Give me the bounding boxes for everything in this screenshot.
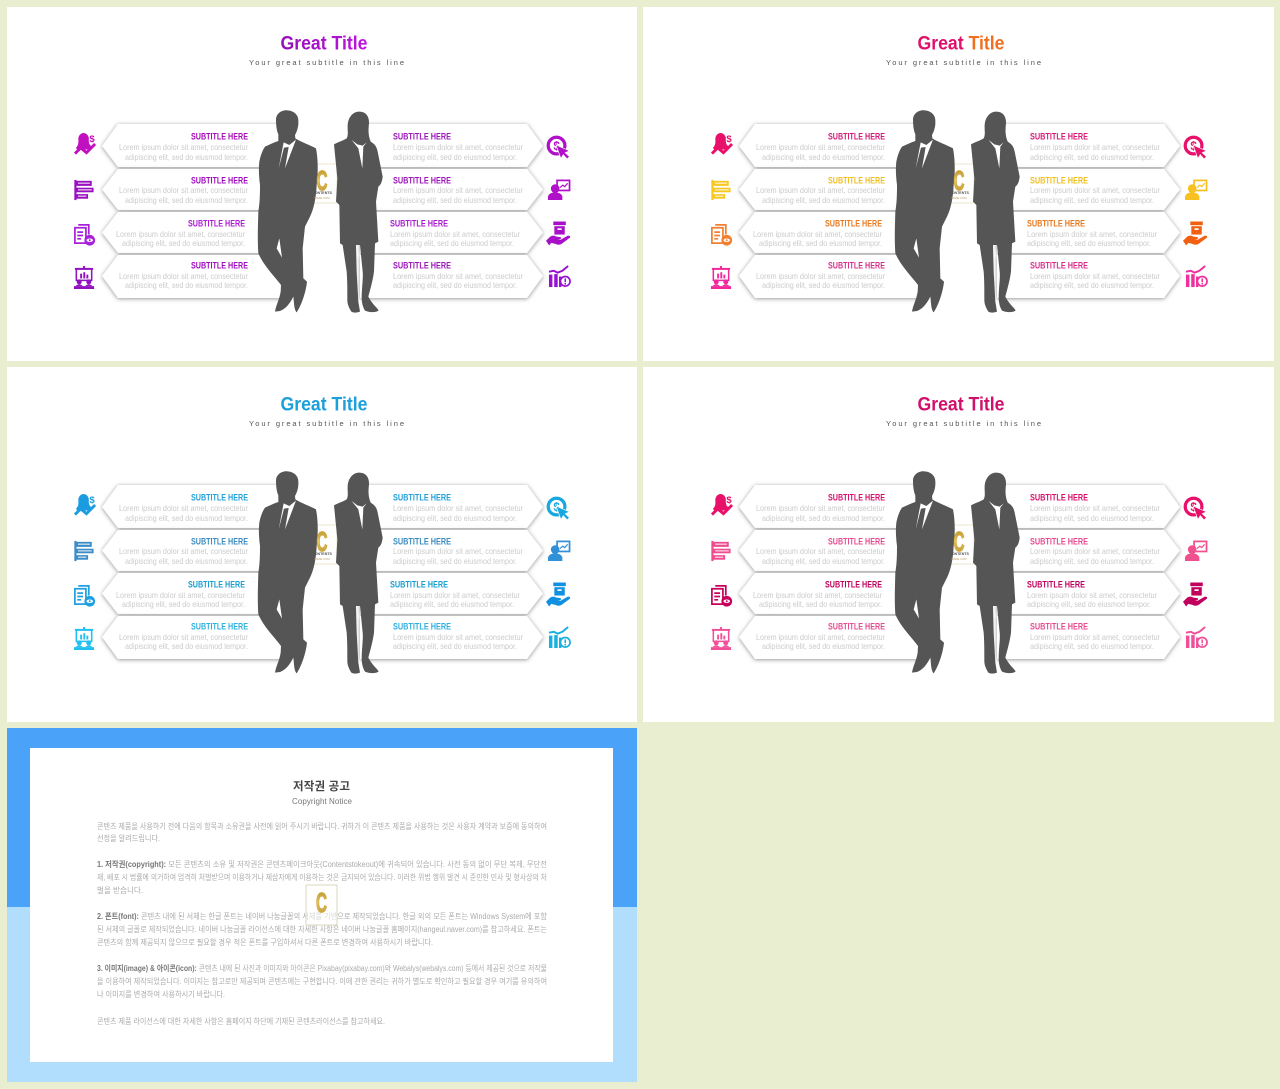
logo watermark: C bbox=[316, 887, 327, 918]
text block: font clause: 된 서체의 글꼴로 제작되었습니다. 네이버 나눔글꼴 라이선스에 대한 자세한 사항은 네이버 나눔글꼴 홈페이지(hangeul.naver.com)를 참고하세요. 폰트는 bbox=[97, 924, 547, 934]
arrow row: left 3 bbox=[102, 573, 285, 614]
arrow row: right 2: adipiscing elit, sed do eiusmod tempor. bbox=[1030, 196, 1154, 205]
arrow row: right 4: adipiscing elit, sed do eiusmod tempor. bbox=[1030, 642, 1154, 651]
arrow row: right 3: adipiscing elit, sed do eiusmod tempor. bbox=[1027, 600, 1151, 609]
arrow row: right 3 bbox=[997, 212, 1180, 253]
heading: copyright notice: 저작권 공고 bbox=[293, 779, 350, 793]
arrow row: left 1: Lorem ipsum dolor sit amet, consectetur bbox=[756, 143, 885, 152]
arrow row: left 3: SUBTITLE HERE bbox=[188, 218, 245, 228]
arrow row: right 2 bbox=[360, 169, 543, 210]
arrow row: right 2: Lorem ipsum dolor sit amet, consectetur bbox=[1030, 547, 1160, 556]
icon: list bbox=[711, 180, 731, 200]
arrow row: left 4: adipiscing elit, sed do eiusmod tempor. bbox=[125, 281, 248, 290]
arrow row: left 2 bbox=[739, 169, 922, 210]
arrow row: left 3: adipiscing elit, sed do eiusmod tempor. bbox=[122, 600, 245, 609]
arrow row: right 4: adipiscing elit, sed do eiusmod tempor. bbox=[393, 642, 517, 651]
arrow row: right 4: Lorem ipsum dolor sit amet, consectetur bbox=[1030, 633, 1160, 642]
icon: list bbox=[74, 180, 94, 200]
arrow row: right 4 bbox=[997, 255, 1180, 298]
arrow row: right 1: adipiscing elit, sed do eiusmod tempor. bbox=[393, 153, 517, 162]
arrow row: left 2: adipiscing elit, sed do eiusmod tempor. bbox=[125, 196, 248, 205]
arrow row: right 3 bbox=[997, 573, 1180, 614]
arrow row: right 2: SUBTITLE HERE bbox=[393, 176, 451, 186]
arrow row: left 1: Lorem ipsum dolor sit amet, consectetur bbox=[119, 504, 248, 513]
arrow row: right 3: Lorem ipsum dolor sit amet, consectetur bbox=[390, 591, 520, 600]
arrow row: left 3: Lorem ipsum dolor sit amet, consectetur bbox=[116, 230, 245, 239]
icon: bell person bbox=[75, 133, 95, 154]
panel: slide 4 crimson bbox=[643, 367, 1274, 722]
arrow row: right 4: Lorem ipsum dolor sit amet, consectetur bbox=[1030, 272, 1160, 281]
icon: chart info bbox=[1186, 627, 1207, 648]
icon: box on hand bbox=[546, 583, 570, 606]
icon: document eye bbox=[712, 586, 732, 607]
icon: document eye bbox=[75, 586, 95, 607]
arrow row: left 4: adipiscing elit, sed do eiusmod tempor. bbox=[762, 642, 885, 651]
arrow row: left 4: Lorem ipsum dolor sit amet, consectetur bbox=[756, 633, 885, 642]
arrow row: left 4: SUBTITLE HERE bbox=[828, 260, 885, 270]
icon: presenter bbox=[1185, 541, 1207, 561]
icon: presenter bbox=[548, 180, 570, 200]
text block: image and icon clause: 3. 이미지(image) & 아이콘(icon): 콘텐츠 내에 된 사진과 이미지와 아이콘은 Pixabay(pixabay.com)와 Webalys(webalys.com) 등에서 제공된 것으로 저작물 bbox=[97, 963, 547, 973]
icon: document eye bbox=[75, 225, 95, 246]
icon: presenter bbox=[548, 541, 570, 561]
arrow row: left 4: adipiscing elit, sed do eiusmod tempor. bbox=[125, 642, 248, 651]
icon: dollar target bbox=[548, 137, 570, 159]
text block: copyright clause: 재, 배포 시 법률에 의거하여 엄격히 처벌받으며 이용하거나 제삼자에게 이용하는 것은 금지되어 있습니다. 이러한 위법 행위 발견 시 준민한 민사 및 형사상의 처 bbox=[97, 872, 547, 882]
icon: presentation board bbox=[711, 627, 731, 650]
title: Great Title bbox=[280, 32, 368, 54]
arrow row: right 2: Lorem ipsum dolor sit amet, consectetur bbox=[393, 547, 523, 556]
arrow row: left 2: SUBTITLE HERE bbox=[191, 536, 248, 546]
text block: font clause bbox=[97, 911, 547, 947]
arrow row: left 2 bbox=[102, 169, 285, 210]
text block: copyright clause bbox=[97, 859, 547, 895]
logo watermark bbox=[306, 885, 337, 925]
arrow row: right 1: adipiscing elit, sed do eiusmod tempor. bbox=[1030, 514, 1154, 523]
arrow row: right 4: SUBTITLE HERE bbox=[393, 260, 451, 270]
arrow row: right 3: Lorem ipsum dolor sit amet, consectetur bbox=[390, 230, 520, 239]
icon: list bbox=[711, 541, 731, 561]
icon: bell person bbox=[712, 494, 732, 515]
text block: image and icon clause: 을 이용하여 제작되었습니다. 이미지는 참고로만 제공되며 콘텐츠에는 구현합니다. 이에 관한 권리는 귀하가 별도로 확인하고 필요할 경우 여기를 유의하여 bbox=[97, 976, 547, 986]
arrow row: left 1 bbox=[102, 485, 285, 528]
icon: document eye bbox=[712, 225, 732, 246]
arrow row: left 1: adipiscing elit, sed do eiusmod tempor. bbox=[762, 153, 885, 162]
arrow row: left 3: Lorem ipsum dolor sit amet, consectetur bbox=[753, 230, 882, 239]
subtitle: Your great subtitle in this line bbox=[886, 419, 1041, 428]
arrow row: right 2: SUBTITLE HERE bbox=[1030, 176, 1088, 186]
arrow row: left 2: Lorem ipsum dolor sit amet, consectetur bbox=[119, 547, 248, 556]
arrow row: left 1: SUBTITLE HERE bbox=[828, 492, 885, 502]
arrow row: right 2 bbox=[997, 530, 1180, 571]
arrow row: left 3 bbox=[739, 573, 922, 614]
panel: slide 2 multicolor bbox=[643, 7, 1274, 361]
icon: dollar target bbox=[1185, 137, 1206, 159]
arrow row: right 4: Lorem ipsum dolor sit amet, consectetur bbox=[393, 272, 523, 281]
arrow row: right 2: adipiscing elit, sed do eiusmod tempor. bbox=[393, 557, 517, 566]
icon: dollar target bbox=[1185, 498, 1206, 520]
arrow row: left 2: Lorem ipsum dolor sit amet, consectetur bbox=[756, 547, 885, 556]
text block: introduction: 콘텐츠 제품을 사용하기 전에 다음의 항목과 소유권을 사전에 읽어 주시기 바랍니다. 귀하가 이 콘텐츠 제품을 사용하는 것은 사용자 계약과 보증에 동의하여 bbox=[97, 821, 547, 831]
arrow row: right 1: SUBTITLE HERE bbox=[393, 492, 451, 502]
arrow row: left 3: SUBTITLE HERE bbox=[188, 580, 245, 590]
arrow row: right 1: adipiscing elit, sed do eiusmod tempor. bbox=[393, 514, 517, 523]
arrow row: right 1 bbox=[997, 124, 1180, 167]
arrow row: left 1: SUBTITLE HERE bbox=[191, 132, 248, 142]
arrow row: right 3: Lorem ipsum dolor sit amet, consectetur bbox=[1027, 230, 1157, 239]
arrow row: left 3 bbox=[739, 212, 922, 253]
icon: box on hand bbox=[1183, 222, 1207, 245]
text block: introduction: 선정을 알려드립니다. bbox=[97, 833, 160, 843]
arrow row: left 4 bbox=[739, 255, 922, 298]
arrow row: right 1: SUBTITLE HERE bbox=[1030, 132, 1088, 142]
arrow row: right 1: SUBTITLE HERE bbox=[1030, 492, 1088, 502]
icon: presenter bbox=[1185, 180, 1207, 200]
arrow row: right 1 bbox=[360, 124, 543, 167]
icon: presentation board bbox=[74, 627, 94, 650]
subtitle: Your great subtitle in this line bbox=[249, 419, 404, 428]
icon: dollar target bbox=[548, 498, 570, 520]
title: Great Title bbox=[918, 32, 1005, 54]
panel: copyright notice slide bbox=[7, 728, 637, 1082]
arrow row: right 3: SUBTITLE HERE bbox=[1027, 218, 1085, 228]
arrow row: left 2: adipiscing elit, sed do eiusmod tempor. bbox=[125, 557, 248, 566]
text block: image and icon clause: 나 이미지를 변경하여 사용하시기 바랍니다. bbox=[97, 989, 225, 999]
subtitle: Your great subtitle in this line bbox=[886, 58, 1041, 67]
arrow row: left 3: SUBTITLE HERE bbox=[825, 218, 882, 228]
arrow row: left 3: Lorem ipsum dolor sit amet, consectetur bbox=[753, 591, 882, 600]
arrow row: left 4 bbox=[102, 255, 285, 298]
arrow row: right 4 bbox=[360, 616, 543, 659]
arrow row: left 1 bbox=[739, 124, 922, 167]
icon: bell person bbox=[712, 133, 732, 154]
arrow row: right 2 bbox=[997, 169, 1180, 210]
arrow row: right 1: SUBTITLE HERE bbox=[393, 132, 451, 142]
sub-heading: English title: Copyright Notice bbox=[292, 797, 353, 806]
arrow row: left 4: Lorem ipsum dolor sit amet, consectetur bbox=[756, 272, 885, 281]
arrow row: left 2: SUBTITLE HERE bbox=[191, 176, 248, 186]
icon: chart info bbox=[1186, 266, 1207, 287]
arrow row: right 1: Lorem ipsum dolor sit amet, consectetur bbox=[393, 143, 523, 152]
arrow row: right 2: Lorem ipsum dolor sit amet, consectetur bbox=[393, 186, 523, 195]
silhouettes: businessman and businesswoman with logo bbox=[895, 110, 1020, 313]
arrow row: right 2: adipiscing elit, sed do eiusmod tempor. bbox=[1030, 557, 1154, 566]
text block: introduction bbox=[97, 821, 547, 843]
arrow row: right 4 bbox=[360, 255, 543, 298]
arrow row: left 1: adipiscing elit, sed do eiusmod tempor. bbox=[762, 514, 885, 523]
arrow row: left 1: Lorem ipsum dolor sit amet, consectetur bbox=[119, 143, 248, 152]
arrow row: left 2 bbox=[102, 530, 285, 571]
arrow row: left 4: Lorem ipsum dolor sit amet, consectetur bbox=[119, 272, 248, 281]
icon: bell person bbox=[75, 494, 95, 515]
icon: list bbox=[74, 541, 94, 561]
text block: image and icon clause bbox=[97, 963, 547, 999]
arrow row: right 3 bbox=[360, 212, 543, 253]
title: Great Title bbox=[918, 394, 1005, 416]
arrow row: right 3: Lorem ipsum dolor sit amet, consectetur bbox=[1027, 591, 1157, 600]
arrow row: right 4 bbox=[997, 616, 1180, 659]
arrow row: left 1: SUBTITLE HERE bbox=[828, 132, 885, 142]
arrow row: left 2: SUBTITLE HERE bbox=[828, 176, 885, 186]
silhouettes: businessman and businesswoman with logo bbox=[895, 471, 1020, 674]
panel: slide 3 blue bbox=[7, 367, 637, 722]
arrow row: right 1 bbox=[997, 485, 1180, 528]
text block: license note: 콘텐츠 제품 라이선스에 대한 자세한 사항은 홈페이지 하단에 기재된 콘텐츠라이선스를 참고하세요. bbox=[97, 1016, 385, 1026]
arrow row: left 3: SUBTITLE HERE bbox=[825, 580, 882, 590]
arrow row: left 3: Lorem ipsum dolor sit amet, consectetur bbox=[116, 591, 245, 600]
subtitle: Your great subtitle in this line bbox=[249, 58, 404, 67]
title: Great Title bbox=[280, 394, 368, 416]
arrow row: left 2: Lorem ipsum dolor sit amet, consectetur bbox=[119, 186, 248, 195]
arrow row: right 3: SUBTITLE HERE bbox=[1027, 580, 1085, 590]
arrow row: right 3: adipiscing elit, sed do eiusmod tempor. bbox=[390, 239, 514, 248]
arrow row: left 4 bbox=[739, 616, 922, 659]
arrow row: left 3 bbox=[102, 212, 285, 253]
icon: box on hand bbox=[546, 222, 570, 245]
arrow row: left 3: adipiscing elit, sed do eiusmod tempor. bbox=[122, 239, 245, 248]
silhouettes: businessman and businesswoman with logo bbox=[258, 471, 383, 674]
text block: copyright clause: 1. 저작권(copyright): 모든 콘텐츠의 소유 및 저작권은 콘텐츠메이크아웃(Contentstokeout)에 귀속되어 있습니다. 사전 동의 없이 무단 복제, 무단전 bbox=[97, 859, 547, 869]
text block: copyright clause: 벌을 받습니다. bbox=[97, 885, 143, 895]
arrow row: right 2: adipiscing elit, sed do eiusmod tempor. bbox=[393, 196, 517, 205]
arrow row: right 2 bbox=[360, 530, 543, 571]
arrow row: left 1: adipiscing elit, sed do eiusmod tempor. bbox=[125, 153, 248, 162]
arrow row: right 4: adipiscing elit, sed do eiusmod tempor. bbox=[1030, 281, 1154, 290]
arrow row: right 1: Lorem ipsum dolor sit amet, consectetur bbox=[1030, 143, 1160, 152]
arrow row: left 4: SUBTITLE HERE bbox=[191, 622, 248, 632]
icon: chart info bbox=[549, 266, 570, 287]
arrow row: right 2: SUBTITLE HERE bbox=[1030, 536, 1088, 546]
arrow row: left 1: SUBTITLE HERE bbox=[191, 492, 248, 502]
arrow row: right 3 bbox=[360, 573, 543, 614]
arrow row: right 3: adipiscing elit, sed do eiusmod tempor. bbox=[390, 600, 514, 609]
arrow row: right 1: Lorem ipsum dolor sit amet, consectetur bbox=[1030, 504, 1160, 513]
icon: presentation board bbox=[74, 266, 94, 289]
arrow row: left 2: SUBTITLE HERE bbox=[828, 536, 885, 546]
arrow row: right 4: Lorem ipsum dolor sit amet, consectetur bbox=[393, 633, 523, 642]
arrow row: left 4 bbox=[102, 616, 285, 659]
arrow row: right 1 bbox=[360, 485, 543, 528]
arrow row: right 4: SUBTITLE HERE bbox=[393, 622, 451, 632]
arrow row: right 1: adipiscing elit, sed do eiusmod tempor. bbox=[1030, 153, 1154, 162]
arrow row: right 2: Lorem ipsum dolor sit amet, consectetur bbox=[1030, 186, 1160, 195]
arrow row: left 1 bbox=[739, 485, 922, 528]
arrow row: left 1: Lorem ipsum dolor sit amet, consectetur bbox=[756, 504, 885, 513]
arrow row: left 1 bbox=[102, 124, 285, 167]
silhouettes: businessman and businesswoman with logo bbox=[258, 110, 383, 313]
arrow row: right 4: SUBTITLE HERE bbox=[1030, 260, 1088, 270]
panel: slide 1 purple bbox=[7, 7, 637, 361]
arrow row: right 1: Lorem ipsum dolor sit amet, consectetur bbox=[393, 504, 523, 513]
icon: box on hand bbox=[1183, 583, 1207, 606]
arrow row: right 4: adipiscing elit, sed do eiusmod tempor. bbox=[393, 281, 517, 290]
arrow row: right 3: adipiscing elit, sed do eiusmod tempor. bbox=[1027, 239, 1151, 248]
arrow row: left 4: SUBTITLE HERE bbox=[191, 260, 248, 270]
arrow row: left 2: Lorem ipsum dolor sit amet, consectetur bbox=[756, 186, 885, 195]
icon: presentation board bbox=[711, 266, 731, 289]
arrow row: right 3: SUBTITLE HERE bbox=[390, 580, 448, 590]
arrow row: left 2: adipiscing elit, sed do eiusmod tempor. bbox=[762, 196, 885, 205]
arrow row: left 2: adipiscing elit, sed do eiusmod tempor. bbox=[762, 557, 885, 566]
text block: font clause: 2. 폰트(font): 콘텐츠 내에 된 서체는 한글 폰트는 네이버 나눔글꼴의 서체를 기반으로 제작되었습니다. 한글 외의 모든 폰트는 Windows System에 포함 bbox=[97, 911, 547, 921]
arrow row: left 1: adipiscing elit, sed do eiusmod tempor. bbox=[125, 514, 248, 523]
icon: chart info bbox=[549, 627, 570, 648]
arrow row: left 4: SUBTITLE HERE bbox=[828, 622, 885, 632]
arrow row: left 4: adipiscing elit, sed do eiusmod tempor. bbox=[762, 281, 885, 290]
text block: font clause: 콘텐츠의 함께 제공되지 않으므로 필요할 경우 적은 폰트를 구입하셔서 다른 폰트로 변경하여 사용하시기 바랍니다. bbox=[97, 937, 433, 947]
arrow row: left 3: adipiscing elit, sed do eiusmod tempor. bbox=[759, 600, 882, 609]
arrow row: left 2 bbox=[739, 530, 922, 571]
arrow row: right 2: SUBTITLE HERE bbox=[393, 536, 451, 546]
arrow row: left 4: Lorem ipsum dolor sit amet, consectetur bbox=[119, 633, 248, 642]
arrow row: right 3: SUBTITLE HERE bbox=[390, 218, 448, 228]
arrow row: right 4: SUBTITLE HERE bbox=[1030, 622, 1088, 632]
arrow row: left 3: adipiscing elit, sed do eiusmod tempor. bbox=[759, 239, 882, 248]
